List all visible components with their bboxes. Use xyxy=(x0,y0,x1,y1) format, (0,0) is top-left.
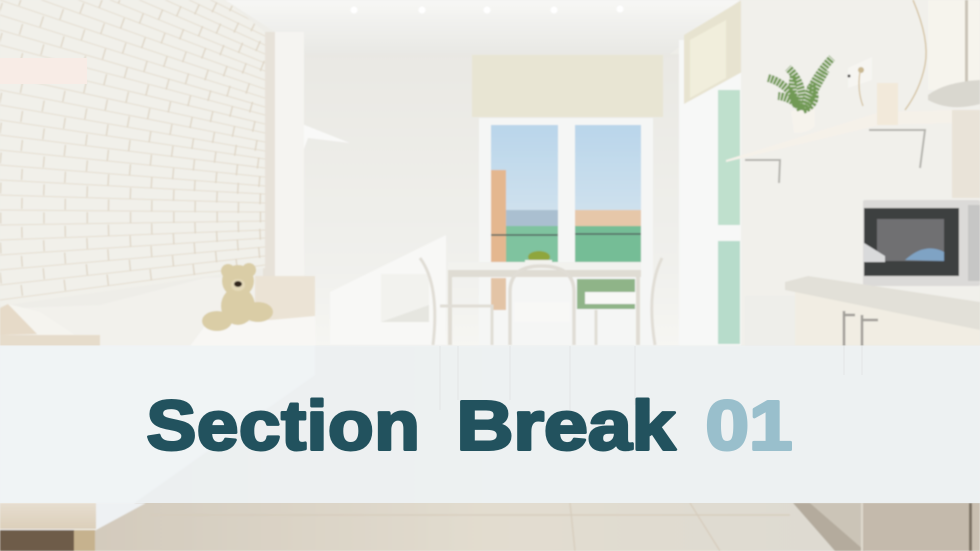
cable xyxy=(905,0,926,110)
brick wall xyxy=(0,0,266,310)
potted plant xyxy=(768,58,832,133)
counter top xyxy=(785,276,980,330)
brick joints, odd rows xyxy=(0,0,265,293)
range hood xyxy=(928,0,980,107)
title: Break xyxy=(456,386,676,464)
bowl of fruit xyxy=(525,251,552,263)
partition pillar xyxy=(263,32,304,352)
microwave xyxy=(863,200,980,286)
teddy bear xyxy=(202,263,273,331)
translucent title band xyxy=(0,346,980,503)
radiator xyxy=(381,274,429,322)
window frame xyxy=(479,118,653,346)
ceiling lights xyxy=(350,6,624,14)
sofa base xyxy=(0,346,315,551)
window left pane xyxy=(491,125,558,310)
title: Section xyxy=(146,386,420,464)
sofa xyxy=(0,276,316,346)
floor xyxy=(0,346,980,551)
reflections through band xyxy=(440,346,862,410)
window roller blind xyxy=(472,55,663,117)
floor tile lines xyxy=(150,503,790,551)
title: 01 xyxy=(706,386,792,464)
shelf xyxy=(726,83,952,183)
cabinet handles xyxy=(844,311,878,346)
chairs xyxy=(420,258,662,345)
peach accent tab xyxy=(0,58,87,84)
light streak xyxy=(297,122,350,165)
radiator under window xyxy=(745,296,795,346)
right side blind xyxy=(684,0,742,104)
table xyxy=(448,262,641,345)
cabinet upper xyxy=(795,290,980,346)
ceiling xyxy=(225,0,740,54)
side wall near window xyxy=(679,40,742,350)
sunlight patch on back wall xyxy=(330,235,446,345)
brick joints, even rows xyxy=(0,0,265,278)
brick courses xyxy=(0,0,265,300)
lower cabinets xyxy=(793,503,980,551)
kitchen wall xyxy=(741,0,980,346)
balcony railing xyxy=(491,234,641,235)
side window xyxy=(718,90,740,344)
window right pane xyxy=(575,125,641,309)
wall socket xyxy=(848,57,872,106)
back wall xyxy=(304,54,679,354)
